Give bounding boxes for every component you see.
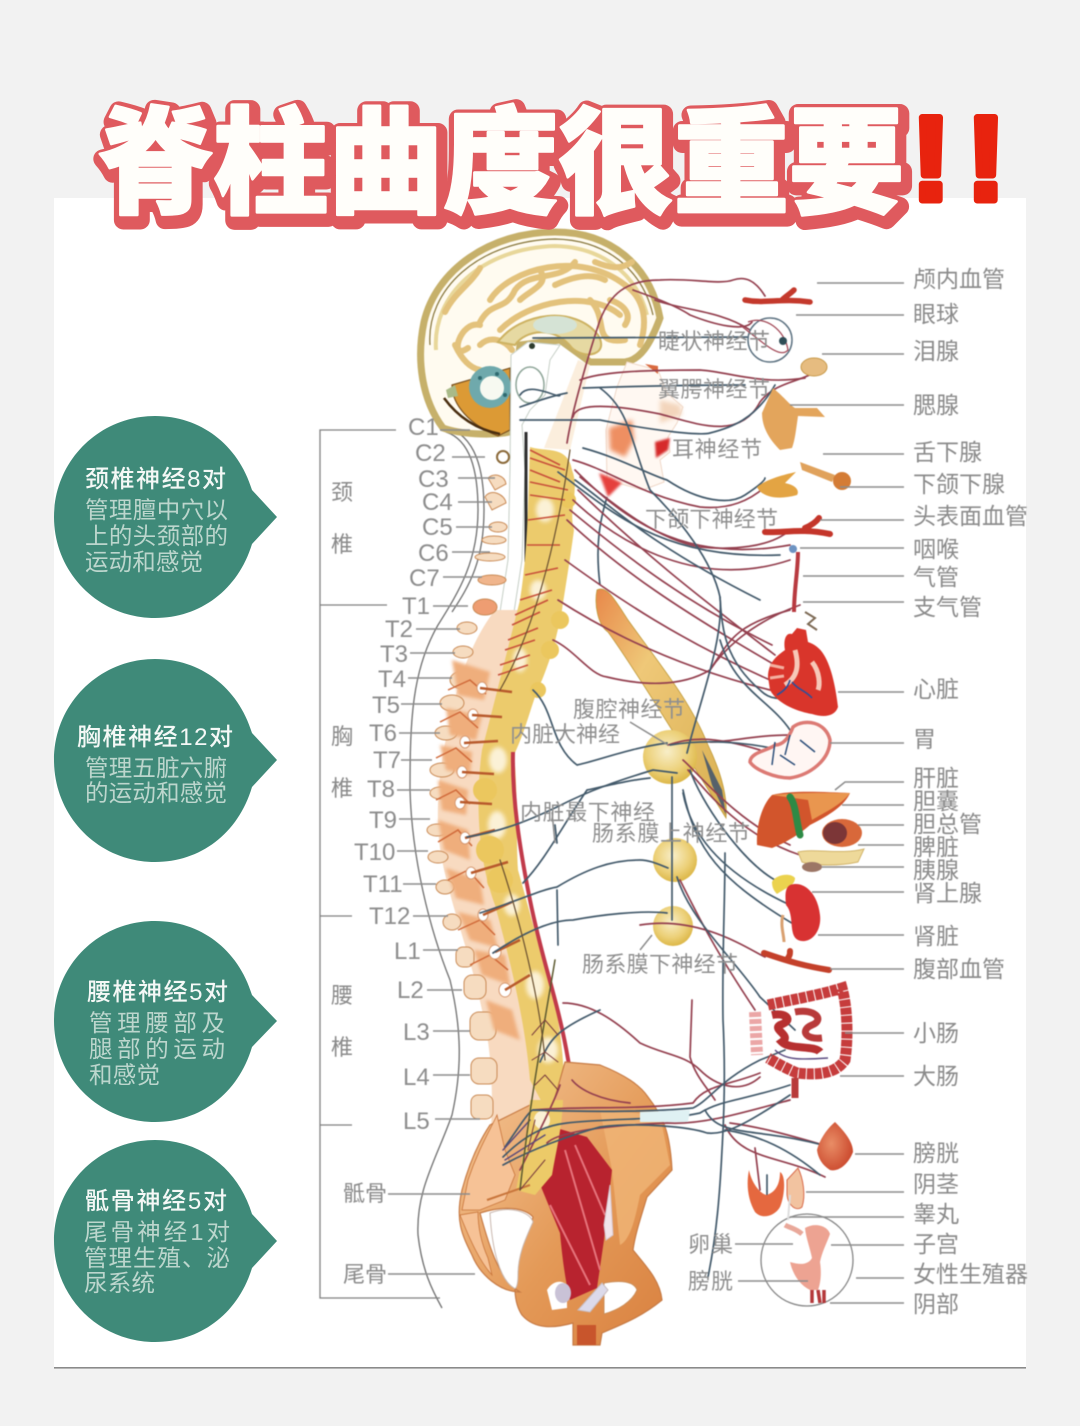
organ: throat and trachea — [789, 545, 817, 630]
inner ganglion labels: 腹腔神经节 — [573, 697, 685, 722]
callout: thoracic — [54, 659, 277, 862]
organ: adrenal gland — [772, 875, 795, 894]
vertebra labels: L5 — [403, 1108, 430, 1135]
organ labels: 女性生殖器 — [913, 1261, 1028, 1287]
callout: thoracic: 管理五脏六腑 — [85, 755, 227, 781]
vertebra labels: C7 — [409, 565, 440, 592]
vertebra labels: T11 — [363, 871, 403, 898]
body outline — [410, 427, 484, 1308]
vertebra labels: L4 — [403, 1064, 430, 1091]
organ: penis — [748, 1170, 784, 1216]
organ: liver — [757, 792, 850, 848]
inner ganglion labels: 翼腭神经节 — [658, 377, 770, 402]
organ labels: 小肠 — [913, 1020, 959, 1046]
callout: lumbar — [54, 921, 277, 1122]
skull and brain — [421, 232, 660, 436]
organ labels: 肾脏 — [913, 923, 959, 949]
callout: lumbar: 腿部的运动 — [89, 1036, 225, 1062]
region labels: 椎 — [331, 776, 353, 801]
callout: cervical: 运动和感觉 — [85, 549, 203, 575]
organ labels: 睾丸 — [913, 1201, 959, 1227]
vertebra labels: T5 — [372, 692, 400, 719]
organ: eyeball — [740, 318, 792, 362]
organ labels: 下颌下腺 — [913, 471, 1005, 497]
vertebra labels: L1 — [394, 938, 421, 965]
organ labels: 大肠 — [913, 1063, 959, 1089]
inner ganglion labels: 卵巢 — [688, 1232, 733, 1257]
organ: spleen — [822, 819, 862, 847]
vertebra labels: T7 — [373, 747, 401, 774]
region labels: 胸 — [331, 724, 353, 749]
diaphragm band — [596, 589, 726, 818]
inner ganglion labels: 肠系膜下神经节 — [582, 952, 738, 977]
vertebra labels: T4 — [378, 666, 406, 693]
callout: sacral: 管理生殖、泌 — [84, 1245, 230, 1271]
inner ganglion labels — [510, 329, 778, 1294]
vertebra labels: L3 — [403, 1019, 430, 1046]
region labels — [331, 480, 387, 1287]
organ labels: 胆囊 — [913, 788, 959, 814]
region labels: 尾骨 — [343, 1262, 387, 1287]
inner ganglion labels: 膀胱 — [688, 1269, 733, 1294]
callout: lumbar: 腰椎神经5对 — [87, 979, 228, 1006]
organ labels: 阴部 — [913, 1291, 959, 1317]
vertebra labels: T12 — [369, 903, 410, 930]
callout: cervical: 颈椎神经8对 — [85, 466, 226, 493]
region labels: 椎 — [331, 532, 353, 557]
organ: sublingual gland — [757, 472, 798, 498]
vertebra labels: T8 — [367, 776, 395, 803]
organ: pancreas — [798, 849, 864, 865]
vertebra labels: C3 — [418, 466, 449, 493]
inner ganglion labels: 耳神经节 — [672, 437, 762, 462]
organ labels: 头表面血管 — [913, 503, 1028, 529]
vertebra labels: T6 — [369, 720, 397, 747]
region labels: 骶骨 — [343, 1181, 387, 1206]
callout: lumbar: 和感觉 — [89, 1062, 160, 1088]
ganglia — [643, 730, 726, 946]
inner ganglion labels: 肠系膜上神经节 — [592, 821, 750, 846]
vertebral column — [427, 451, 545, 1140]
inner ganglion labels: 下颌下神经节 — [645, 507, 778, 532]
leader lines — [388, 283, 904, 1303]
organ: bladder — [817, 1122, 853, 1170]
organ: intestines — [755, 988, 847, 1098]
organ labels: 眼球 — [913, 301, 959, 327]
anatomy illustration — [320, 232, 1028, 1345]
organ labels: 颅内血管 — [913, 266, 1005, 292]
organ labels: 胆总管 — [913, 811, 982, 837]
aorta — [513, 752, 570, 1070]
organ: stomach — [750, 722, 830, 778]
inner ganglion labels: 内脏大神经 — [510, 722, 620, 747]
region labels: 颈 — [331, 480, 353, 505]
nerve network — [467, 279, 840, 1277]
vertebra labels: T9 — [369, 807, 397, 834]
vertebra labels — [354, 414, 453, 1135]
organ: heart — [768, 628, 838, 716]
brainstem and spinal cord — [498, 342, 560, 625]
callout: thoracic: 胸椎神经12对 — [77, 724, 233, 751]
organ labels: 腮腺 — [913, 392, 959, 418]
organ labels — [913, 266, 1028, 1317]
organ: testis — [787, 1168, 804, 1209]
organ labels: 肾上腺 — [913, 880, 982, 906]
vertebra nerve roots — [455, 450, 568, 997]
organ: lacrimal gland — [801, 358, 827, 376]
vertebra labels: T2 — [385, 616, 413, 643]
callout: sacral — [54, 1140, 277, 1342]
spine region bracket — [320, 430, 440, 1298]
organ labels: 腹部血管 — [913, 956, 1005, 982]
organ: intracranial vessel — [745, 290, 810, 302]
organ: abdominal vessel — [764, 951, 829, 970]
organ: liver highlight — [772, 793, 850, 820]
callout: cervical: 上的头颈部的 — [85, 523, 228, 549]
organ labels: 子宫 — [913, 1231, 959, 1257]
pelvis — [459, 1062, 672, 1345]
organ labels: 胰腺 — [913, 857, 959, 883]
title: 脊柱曲度很重要 — [98, 99, 904, 229]
callout: sacral: 尿系统 — [84, 1270, 155, 1296]
region labels: 腰 — [331, 983, 353, 1008]
vertebra labels: C4 — [422, 489, 453, 516]
title: 脊柱曲度很重要 — [101, 104, 907, 234]
vertebra labels: T1 — [402, 593, 430, 620]
vertebra labels: C5 — [422, 514, 453, 541]
region labels: 椎 — [331, 1035, 353, 1060]
organ labels: 阴茎 — [913, 1171, 959, 1197]
organ labels: 气管 — [913, 564, 959, 590]
callout: sacral: 尾骨神经1对 — [84, 1219, 230, 1245]
organ labels: 泪腺 — [913, 338, 959, 364]
callout: cervical — [54, 416, 277, 618]
organ labels: 咽喉 — [913, 536, 959, 562]
organ: scalp vessel — [765, 518, 830, 534]
organ labels: 胃 — [913, 726, 936, 752]
organ labels: 肝脏 — [913, 765, 959, 791]
organ labels: 舌下腺 — [913, 439, 982, 465]
vertebra labels: L2 — [397, 977, 424, 1004]
organ labels: 支气管 — [913, 594, 982, 620]
callout: sacral: 骶骨神经5对 — [85, 1188, 227, 1215]
callout: cervical: 管理膻中穴以 — [85, 497, 228, 523]
organ: gallbladder — [790, 797, 800, 835]
organ labels: 膀胱 — [913, 1140, 959, 1166]
callout: thoracic: 的运动和感觉 — [85, 780, 227, 806]
vertebra labels: C6 — [418, 540, 449, 567]
yellow ganglion chain — [473, 447, 576, 1140]
organ: kidney — [782, 884, 820, 942]
callout: lumbar: 管理腰部及 — [89, 1010, 225, 1036]
title: !! — [911, 92, 1006, 226]
organ: parotid gland — [762, 388, 825, 450]
face — [544, 360, 683, 585]
vertebra labels: C2 — [415, 440, 446, 467]
vertebra labels: T10 — [354, 839, 395, 866]
vertebra labels: C1 — [408, 414, 439, 441]
vertebra labels: T3 — [380, 641, 408, 668]
organ labels: 心脏 — [913, 676, 959, 702]
organ: submandibular gland — [800, 462, 851, 490]
organ: female reproductive circle — [761, 1195, 853, 1306]
inner ganglion labels: 内脏最下神经 — [520, 800, 655, 825]
organ labels: 脾脏 — [913, 834, 959, 860]
organ: duodenum — [802, 862, 822, 872]
inner ganglion labels: 睫状神经节 — [658, 329, 770, 354]
